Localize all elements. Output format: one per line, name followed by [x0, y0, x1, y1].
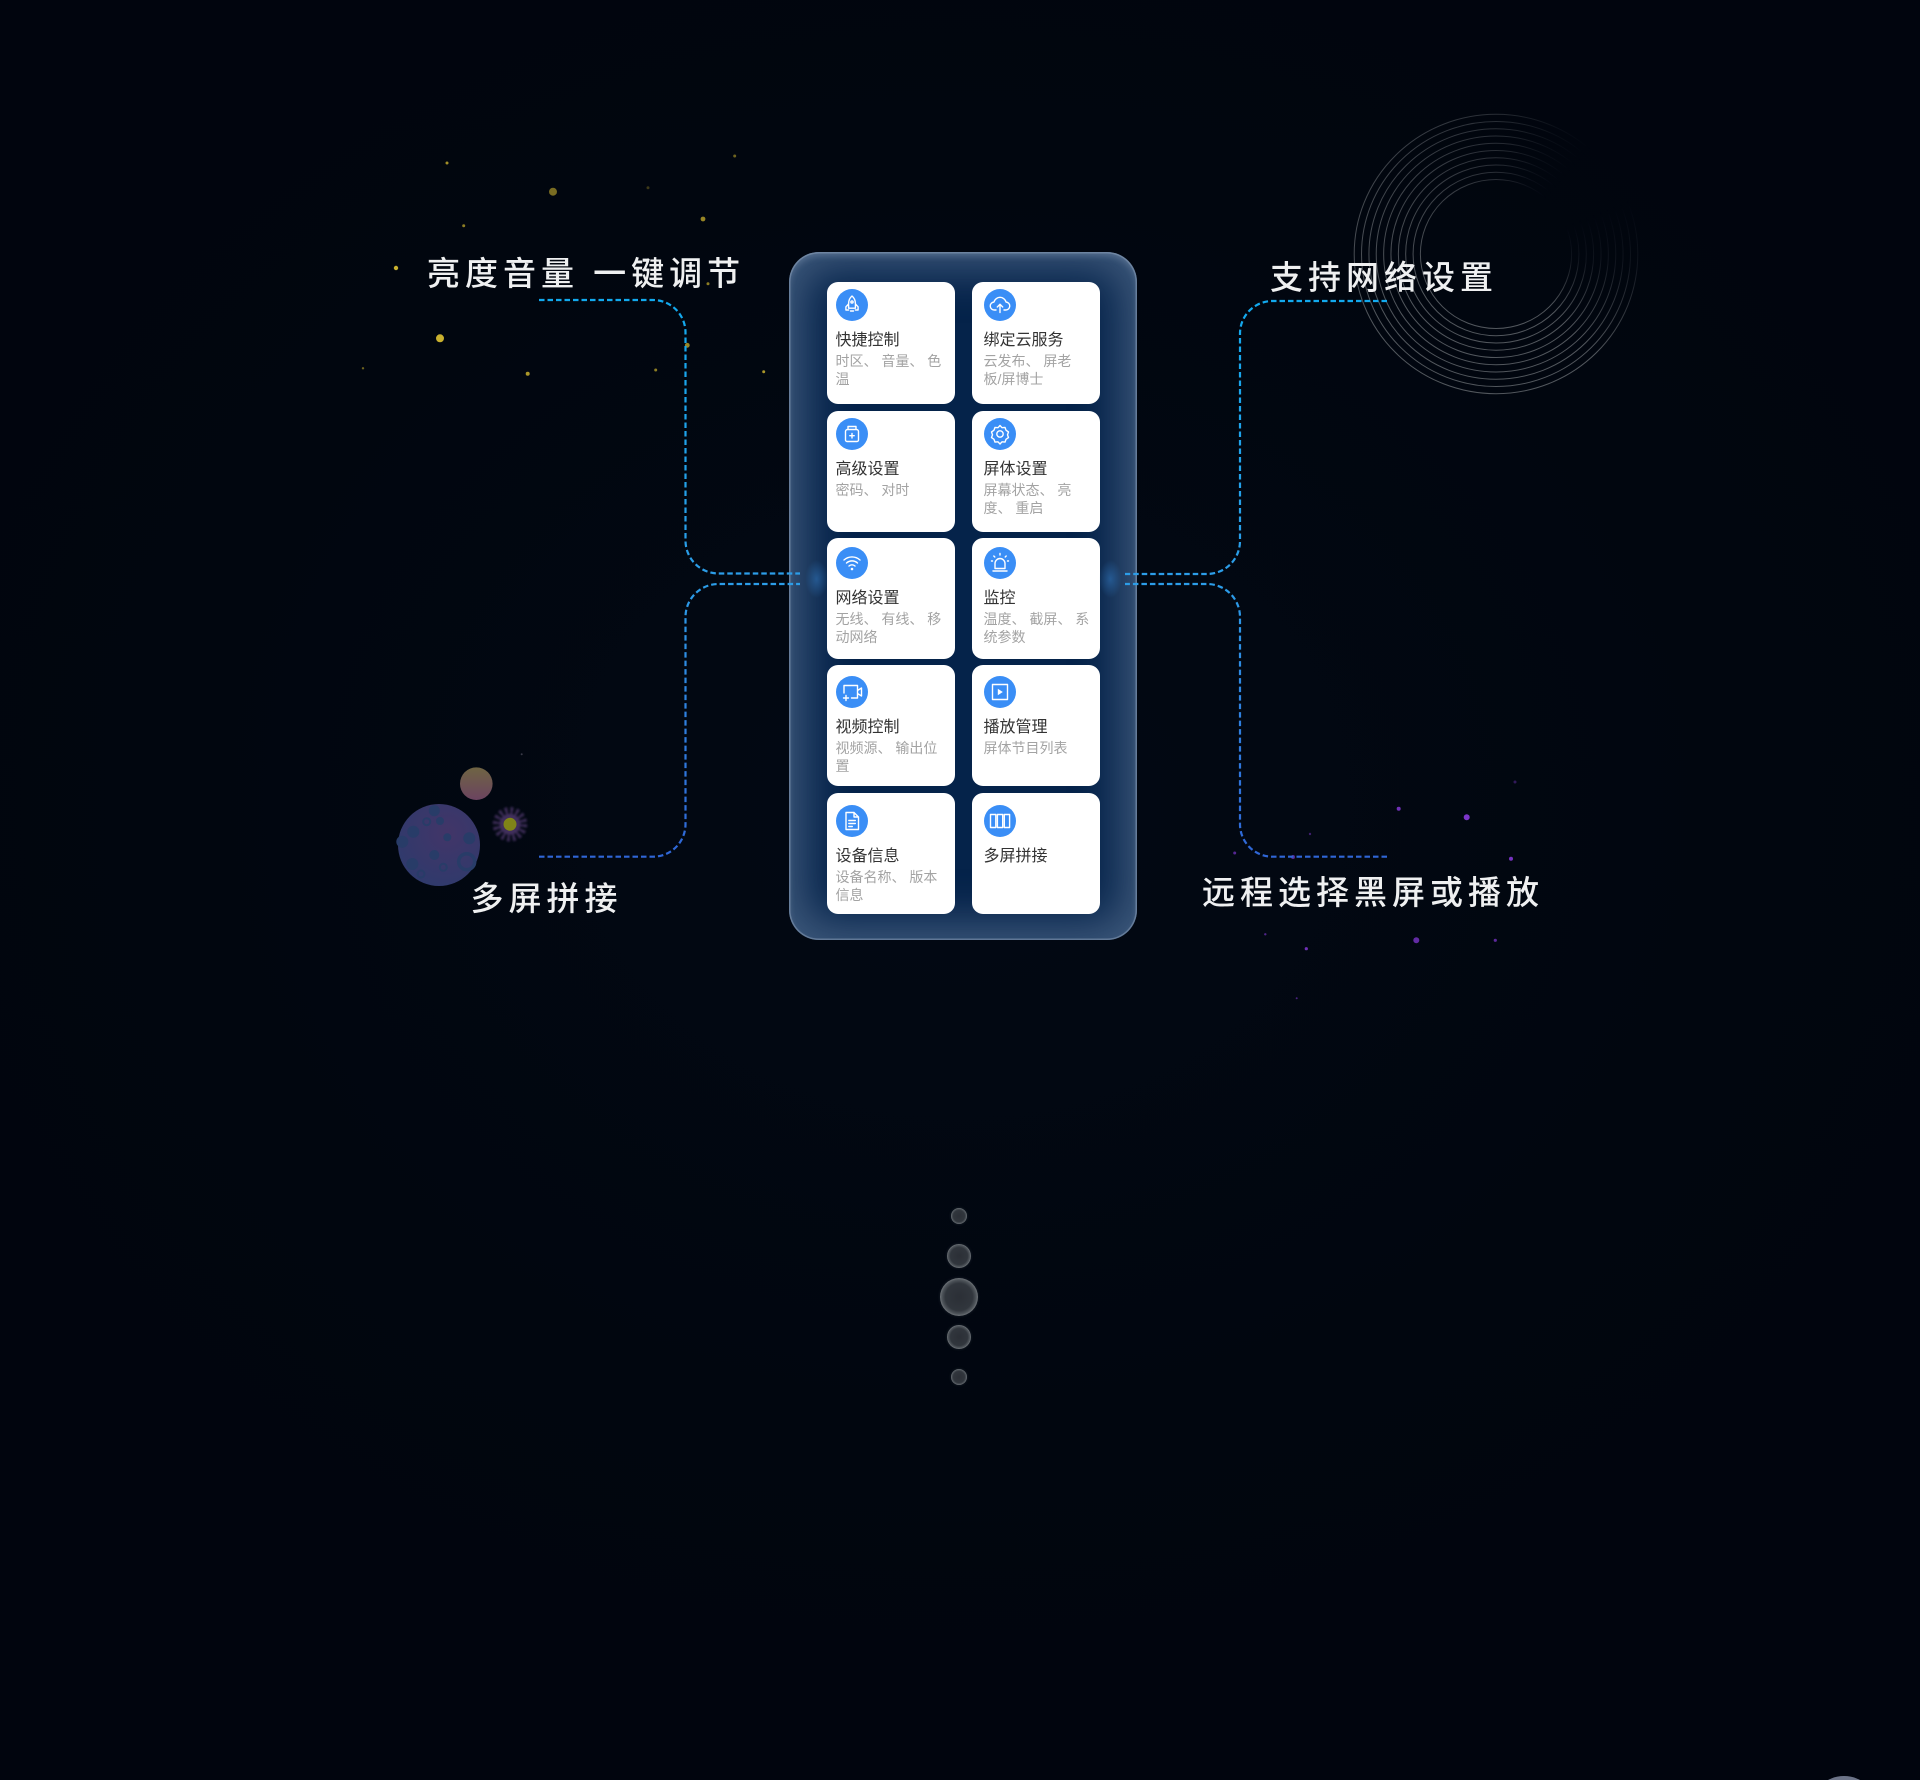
description — [835, 353, 941, 387]
description: 时区、 音量、 色 — [835, 353, 941, 369]
card: 网络设置 — [827, 538, 955, 659]
icon: document — [836, 805, 868, 837]
card: 监控 — [972, 538, 1100, 659]
description: 无线、 有线、 移 — [835, 611, 941, 627]
heading: 亮度音量 一键调节: 亮度音量 一键调节 — [427, 255, 745, 292]
text: 快捷控制: 快捷控制 — [835, 332, 900, 349]
icon: gear — [984, 418, 1016, 450]
heading: 支持网络设置: 支持网络设置 — [1270, 259, 1498, 296]
bubble 4 — [947, 1325, 971, 1349]
icon: rocket — [836, 289, 868, 321]
purple star field — [1233, 780, 1516, 1000]
dashed connectors — [539, 298, 1387, 858]
description: 置 — [835, 758, 849, 774]
connector: bottom left — [539, 584, 800, 857]
decorative concentric rings — [1354, 114, 1638, 394]
bubble 1 — [951, 1208, 967, 1224]
text: 设备信息: 设备信息 — [835, 848, 900, 865]
text: 绑定云服务: 绑定云服务 — [983, 332, 1064, 349]
connector glow left — [790, 560, 828, 598]
icon: wifi — [836, 547, 868, 579]
description: 温 — [835, 371, 849, 387]
connector: top left — [539, 300, 800, 574]
description: 统参数 — [983, 629, 1025, 645]
card: 视频控制 — [827, 665, 955, 786]
description — [983, 482, 1071, 516]
bubble column — [940, 1208, 978, 1386]
text: 视频控制: 视频控制 — [835, 719, 900, 736]
icon: three columns — [984, 805, 1016, 837]
icon: play — [984, 676, 1016, 708]
connector: top right — [1125, 301, 1387, 574]
card: 屏体设置 — [972, 411, 1100, 532]
description — [835, 611, 941, 645]
card: 设备信息 — [827, 793, 955, 914]
text: 播放管理: 播放管理 — [983, 719, 1048, 736]
card: 快捷控制 — [827, 282, 955, 404]
description: 信息 — [835, 887, 863, 903]
text: 网络设置: 网络设置 — [835, 590, 900, 607]
connector glow right — [1099, 560, 1137, 598]
card: 播放管理 — [972, 665, 1100, 786]
heading: 远程选择黑屏或播放: 远程选择黑屏或播放 — [1202, 874, 1544, 911]
icon: cloud upload — [984, 289, 1016, 321]
heading: 多屏拼接: 多屏拼接 — [470, 880, 622, 917]
corner sphere — [1828, 1776, 1860, 1780]
text: 多屏拼接: 多屏拼接 — [983, 848, 1048, 865]
card: 绑定云服务 — [972, 282, 1100, 404]
text: 屏体设置: 屏体设置 — [983, 461, 1048, 478]
description: 温度、 截屏、 系 — [983, 611, 1089, 627]
description: 板/屏博士 — [983, 371, 1043, 387]
description: 屏幕状态、 亮 — [983, 482, 1071, 498]
text: 监控: 监控 — [983, 590, 1016, 607]
description: 密码、 对时 — [835, 482, 909, 498]
description — [983, 353, 1071, 387]
bubble 2 — [947, 1244, 971, 1268]
description: 设备名称、 版本 — [835, 869, 937, 885]
description — [835, 740, 937, 774]
description: 云发布、 屏老 — [983, 353, 1071, 369]
text: 高级设置: 高级设置 — [835, 461, 900, 478]
description — [983, 611, 1089, 645]
bubble 5 — [951, 1369, 967, 1385]
bubble 3 — [940, 1278, 978, 1316]
description: 视频源、 输出位 — [835, 740, 937, 756]
icon: case plus — [836, 418, 868, 450]
card: 多屏拼接 — [972, 793, 1100, 914]
description: 动网络 — [835, 629, 877, 645]
description: 屏体节目列表 — [983, 740, 1067, 756]
small planet — [460, 767, 493, 800]
card: 高级设置 — [827, 411, 955, 532]
large planet — [396, 804, 480, 886]
planets illustration — [396, 753, 528, 886]
connector: bottom right — [1125, 584, 1387, 857]
spiky sun — [497, 811, 523, 837]
icon: siren — [984, 547, 1016, 579]
description: 度、 重启 — [983, 500, 1043, 516]
panel: device menu — [788, 252, 1137, 940]
description — [835, 869, 937, 903]
yellow star field — [362, 154, 766, 376]
icon: video — [836, 676, 868, 708]
